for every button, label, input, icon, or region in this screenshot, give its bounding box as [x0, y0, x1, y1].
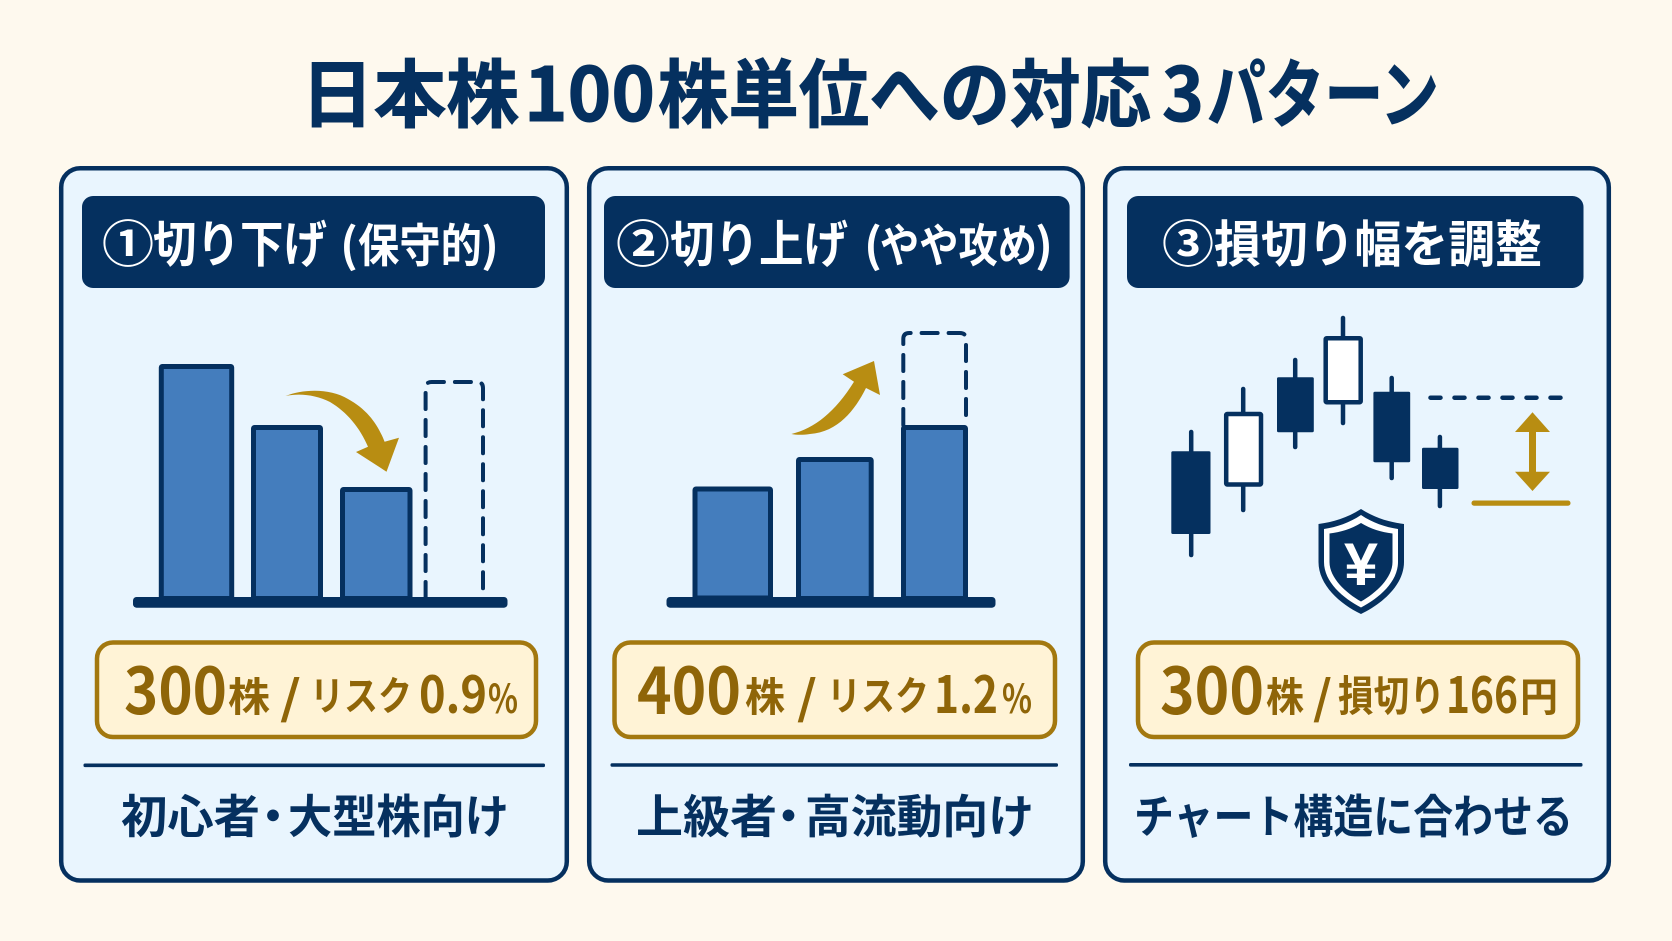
value pill: 300 shares risk 0.9%: %: [488, 667, 518, 725]
panel: pattern 2 cut up: [589, 168, 1083, 880]
heading: pattern 1: (: [340, 210, 358, 276]
caption: pattern 1: 初心者: [121, 781, 260, 847]
value pill: 300 shares stop 166 yen: 300: [1160, 641, 1264, 733]
title: [301, 36, 1439, 143]
value pill: 300 shares stop 166 yen: 損切り: [1338, 663, 1445, 724]
panel: pattern 1 cut down: [61, 168, 567, 880]
heading: pattern 3: [1127, 196, 1584, 288]
arrow: down: [286, 391, 399, 472]
value pill: 300 shares stop 166 yen: [1138, 641, 1578, 737]
heading: pattern 3: 損切り幅を調整: [1214, 205, 1542, 277]
title: 日本株: [301, 36, 519, 143]
caption: pattern 1: [121, 781, 509, 847]
title: パターン: [1207, 36, 1439, 143]
heading: pattern 1: ): [481, 210, 499, 276]
heading: pattern 1: ①: [102, 205, 154, 277]
value pill: 400 shares risk 1.2%: [614, 641, 1055, 737]
value pill: 400 shares risk 1.2%: 1.2: [934, 654, 998, 728]
candlestick chart: [1171, 318, 1458, 555]
heading: pattern 2: やや攻め: [880, 210, 1037, 276]
value pill: 300 shares risk 0.9%: 0.9: [419, 654, 487, 728]
arrow: stop width: [1515, 412, 1550, 491]
heading: pattern 1: 切り下げ: [153, 205, 327, 277]
value pill: 300 shares risk 0.9%: /: [280, 662, 301, 728]
caption: pattern 1: 大型株向け: [288, 781, 509, 847]
caption: pattern 1: ・: [250, 781, 296, 847]
title: 3: [1162, 36, 1204, 143]
heading: pattern 1: [82, 196, 545, 288]
title: 株単位への対応: [658, 36, 1151, 143]
value pill: 400 shares risk 1.2%: %: [1002, 667, 1032, 725]
caption: pattern 2: [636, 781, 1034, 847]
heading: pattern 1: 保守的: [358, 210, 482, 276]
panel: pattern 3 adjust stop width: [1105, 168, 1609, 880]
icon: yen shield: ¥: [1344, 531, 1379, 598]
bar chart: increasing position: [666, 333, 996, 608]
caption: pattern 2: 上級者: [636, 781, 777, 847]
heading: pattern 2: (: [864, 210, 882, 276]
caption: pattern 2: ・: [766, 781, 812, 847]
value pill: 400 shares risk 1.2%: リスク: [827, 664, 929, 722]
caption: pattern 3: チャート構造に合わせる: [1134, 781, 1573, 847]
heading: pattern 2: [604, 196, 1070, 288]
title: 100: [524, 36, 655, 143]
value pill: 300 shares stop 166 yen: /: [1313, 662, 1332, 728]
heading: pattern 2: ): [1035, 210, 1053, 276]
caption: pattern 2: 高流動向け: [805, 781, 1034, 847]
value pill: 300 shares risk 0.9%: リスク: [310, 664, 412, 722]
icon: yen shield: [1318, 509, 1404, 614]
value pill: 400 shares risk 1.2%: /: [797, 662, 817, 728]
value pill: 400 shares risk 1.2%: 400: [637, 641, 741, 733]
value pill: 300 shares risk 0.9%: 300: [124, 641, 227, 733]
heading: pattern 2: ②: [616, 205, 670, 277]
value pill: 400 shares risk 1.2%: 株: [745, 665, 785, 723]
heading: pattern 3: ③: [1162, 205, 1214, 277]
value pill: 300 shares stop 166 yen: 株: [1266, 665, 1304, 723]
value pill: 300 shares stop 166 yen: 円: [1520, 665, 1558, 723]
value pill: 300 shares risk 0.9%: [97, 641, 536, 737]
bar chart: decreasing position: [133, 366, 508, 608]
heading: pattern 2: 切り上げ: [670, 205, 848, 277]
arrow: up: [791, 361, 880, 435]
value pill: 300 shares stop 166 yen: 166: [1446, 656, 1518, 728]
value pill: 300 shares risk 0.9%: 株: [228, 665, 270, 723]
